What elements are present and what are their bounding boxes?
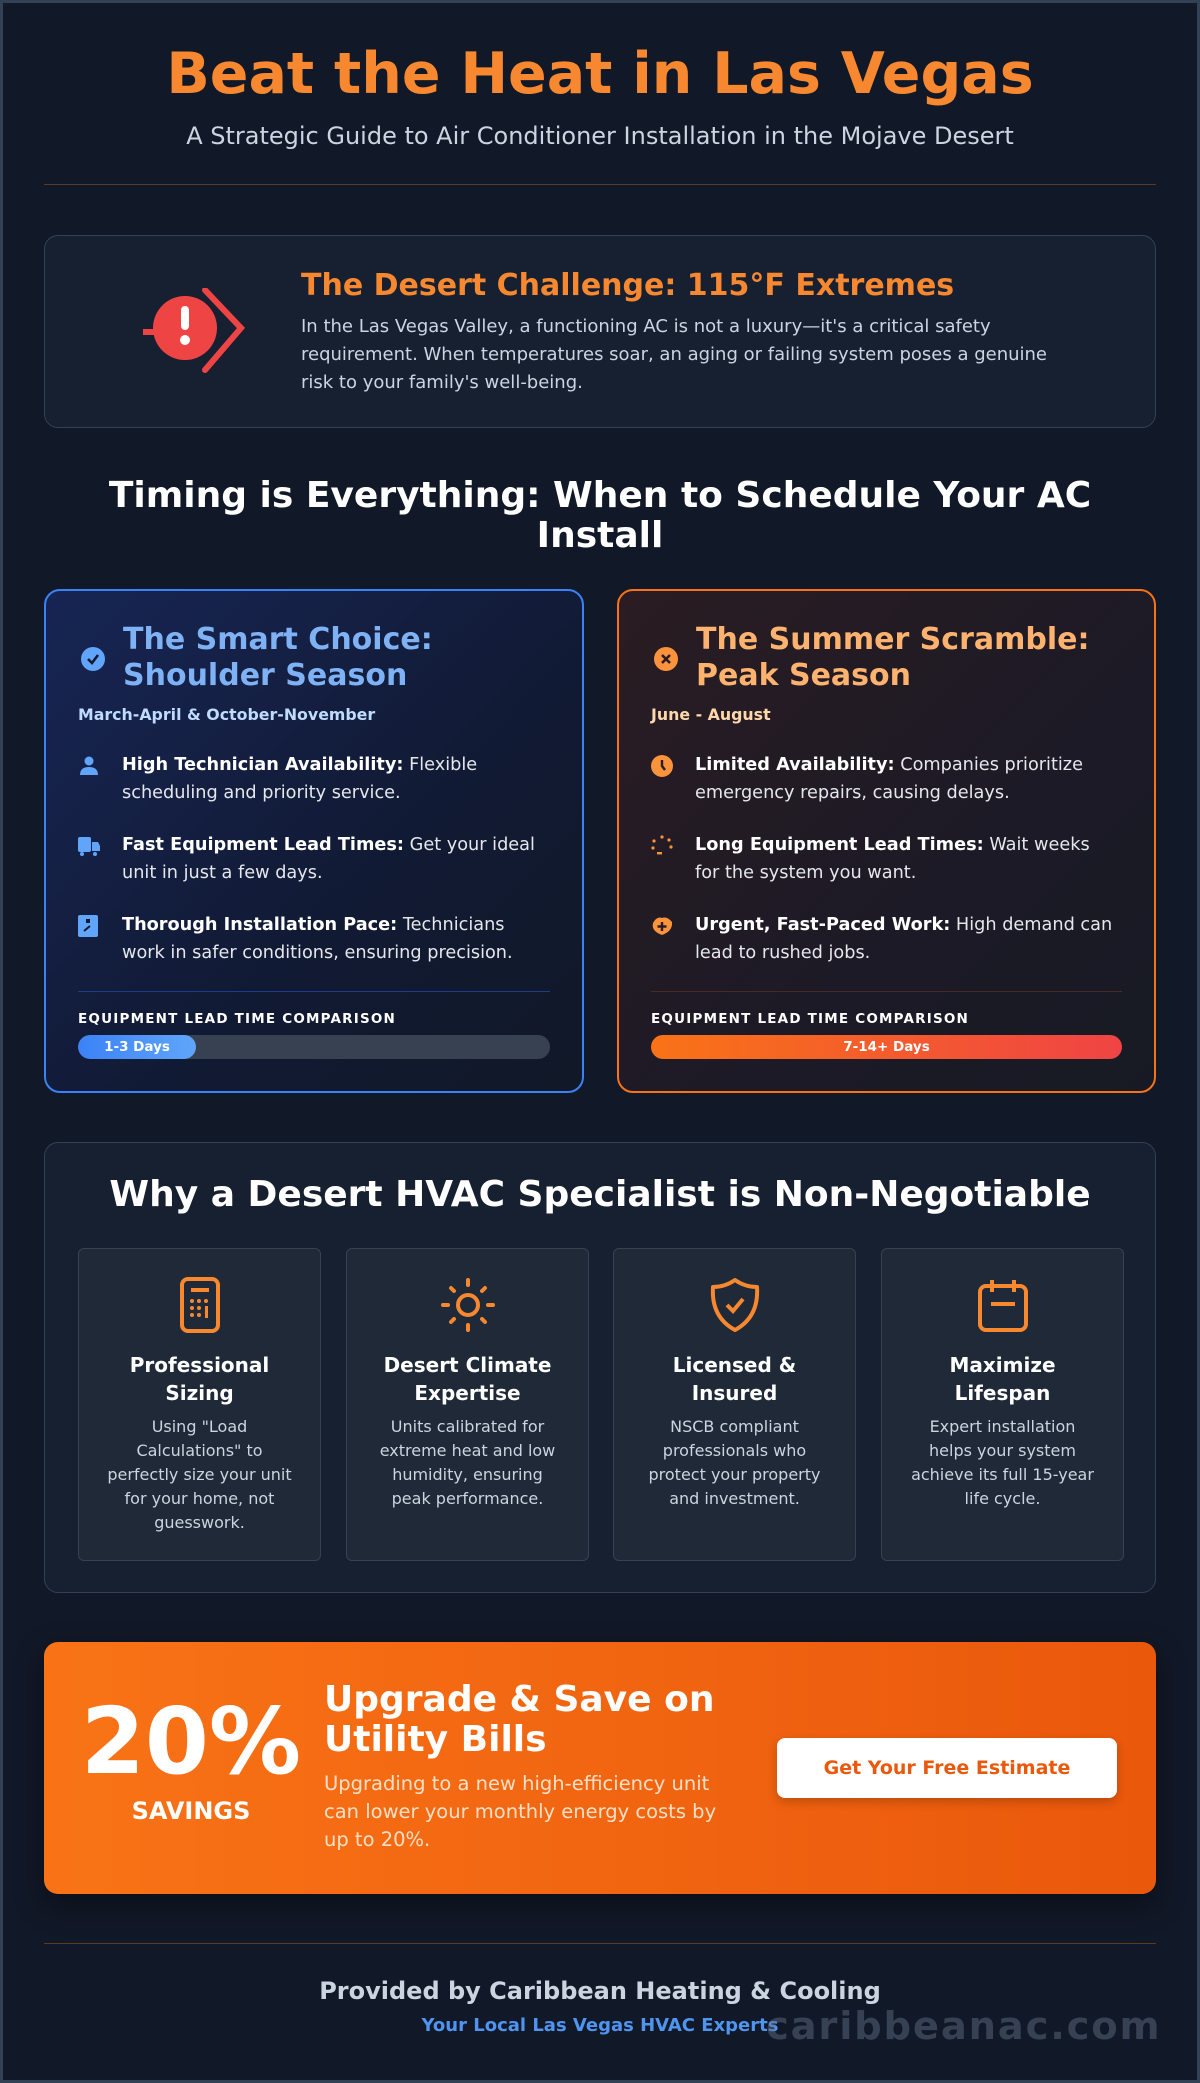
text: Upgrading to a new high-efficiency unit can lower your monthly energy costs by up to 20%. bbox=[324, 1772, 716, 1851]
card: climate: Expertise bbox=[414, 1381, 521, 1405]
list item: Limited Availability: Companies prioritize emergency repairs, causing delays. bbox=[695, 755, 1083, 803]
title: Beat the Heat in Las Vegas bbox=[166, 41, 1034, 107]
card: licensed bbox=[613, 1248, 856, 1561]
icon: sun bbox=[441, 1278, 495, 1332]
card: lifespan: Expert installation helps your system achieve its full 15-year life cycle. bbox=[911, 1417, 1094, 1508]
card: sizing: Using "Load Calculations" to perfectly size your unit for your home, not guesswork. bbox=[107, 1417, 292, 1532]
card: sizing: Sizing bbox=[165, 1381, 234, 1405]
list item: Long Equipment Lead Times: Wait weeks for the system you want. bbox=[695, 835, 1090, 883]
heading: Peak Season bbox=[696, 658, 911, 693]
heading: The Desert Challenge: 115°F Extremes bbox=[301, 268, 954, 303]
panel: shoulder season bbox=[44, 589, 584, 1093]
card: climate: Units calibrated for extreme heat and low humidity, ensuring peak performance. bbox=[380, 1417, 555, 1508]
heading: The Summer Scramble: bbox=[696, 622, 1089, 657]
heading: The Smart Choice: bbox=[123, 622, 433, 657]
card: licensed: Insured bbox=[692, 1381, 777, 1405]
card: sizing bbox=[78, 1248, 321, 1561]
list item: Urgent, Fast-Paced Work: High demand can lead to rushed jobs. bbox=[695, 915, 1112, 963]
icon: shield bbox=[710, 1278, 760, 1332]
card: licensed: NSCB compliant professionals who protect your property and investment. bbox=[648, 1417, 820, 1508]
bar chart bbox=[78, 1035, 550, 1059]
heading: Why a Desert HVAC Specialist is Non-Negotiable bbox=[109, 1174, 1091, 1215]
label: EQUIPMENT LEAD TIME COMPARISON bbox=[78, 1011, 396, 1027]
icon: calculator bbox=[180, 1277, 220, 1333]
panel: peak season bbox=[617, 589, 1156, 1093]
icon: x bbox=[654, 647, 678, 671]
heading bbox=[696, 622, 1089, 693]
list item: Thorough Installation Pace: Technicians work in safer conditions, ensuring precision. bbox=[122, 915, 513, 963]
panel: desert challenge bbox=[44, 235, 1156, 428]
icon: check bbox=[81, 647, 105, 671]
heading bbox=[123, 622, 433, 693]
dates: June - August bbox=[651, 705, 771, 724]
heading: timing: Timing is Everything: When to Schedule Your AC Install bbox=[109, 475, 1091, 556]
card: climate: Desert Climate bbox=[384, 1353, 551, 1377]
subtitle: A Strategic Guide to Air Conditioner Installation in the Mojave Desert bbox=[186, 122, 1014, 150]
text: In the Las Vegas Valley, a functioning AC is not a luxury—it's a critical safety requirement. When temperatures soar, an aging or failing system poses a genuine risk to your family's well-being. bbox=[301, 316, 1047, 393]
stat: 20%: 20% bbox=[81, 1688, 301, 1795]
button bbox=[777, 1738, 1117, 1798]
card: lifespan bbox=[881, 1248, 1124, 1561]
card: climate bbox=[346, 1248, 589, 1561]
panel: specialist bbox=[44, 1142, 1156, 1593]
list item: High Technician Availability: Flexible scheduling and priority service. bbox=[122, 755, 477, 803]
stat: 20%: SAVINGS bbox=[132, 1797, 250, 1825]
icon: calendar bbox=[978, 1280, 1028, 1332]
button: Get Your Free Estimate bbox=[824, 1757, 1070, 1779]
card: lifespan: Maximize bbox=[949, 1353, 1056, 1377]
panel: savings CTA bbox=[44, 1642, 1156, 1894]
dates: March-April & October-November bbox=[78, 705, 375, 724]
bar chart: 7-14+ Days bbox=[843, 1039, 930, 1055]
bar chart: 1-3 Days bbox=[104, 1039, 170, 1055]
footer: Provided by Caribbean Heating & Cooling bbox=[319, 1977, 881, 2005]
heading: Shoulder Season bbox=[123, 658, 407, 693]
label: EQUIPMENT LEAD TIME COMPARISON bbox=[651, 1011, 969, 1027]
watermark: caribbeanac.com bbox=[766, 2004, 1161, 2049]
footer tagline: Your Local Las Vegas HVAC Experts bbox=[422, 2015, 778, 2036]
icon: alert bbox=[143, 288, 245, 373]
card: lifespan: Lifespan bbox=[955, 1381, 1050, 1405]
card: licensed: Licensed & bbox=[673, 1353, 796, 1377]
heading: Upgrade & Save on Utility Bills bbox=[324, 1679, 714, 1760]
bar chart bbox=[651, 1035, 1122, 1059]
list item: Fast Equipment Lead Times: Get your ideal unit in just a few days. bbox=[122, 835, 535, 883]
card: sizing: Professional bbox=[130, 1353, 269, 1377]
